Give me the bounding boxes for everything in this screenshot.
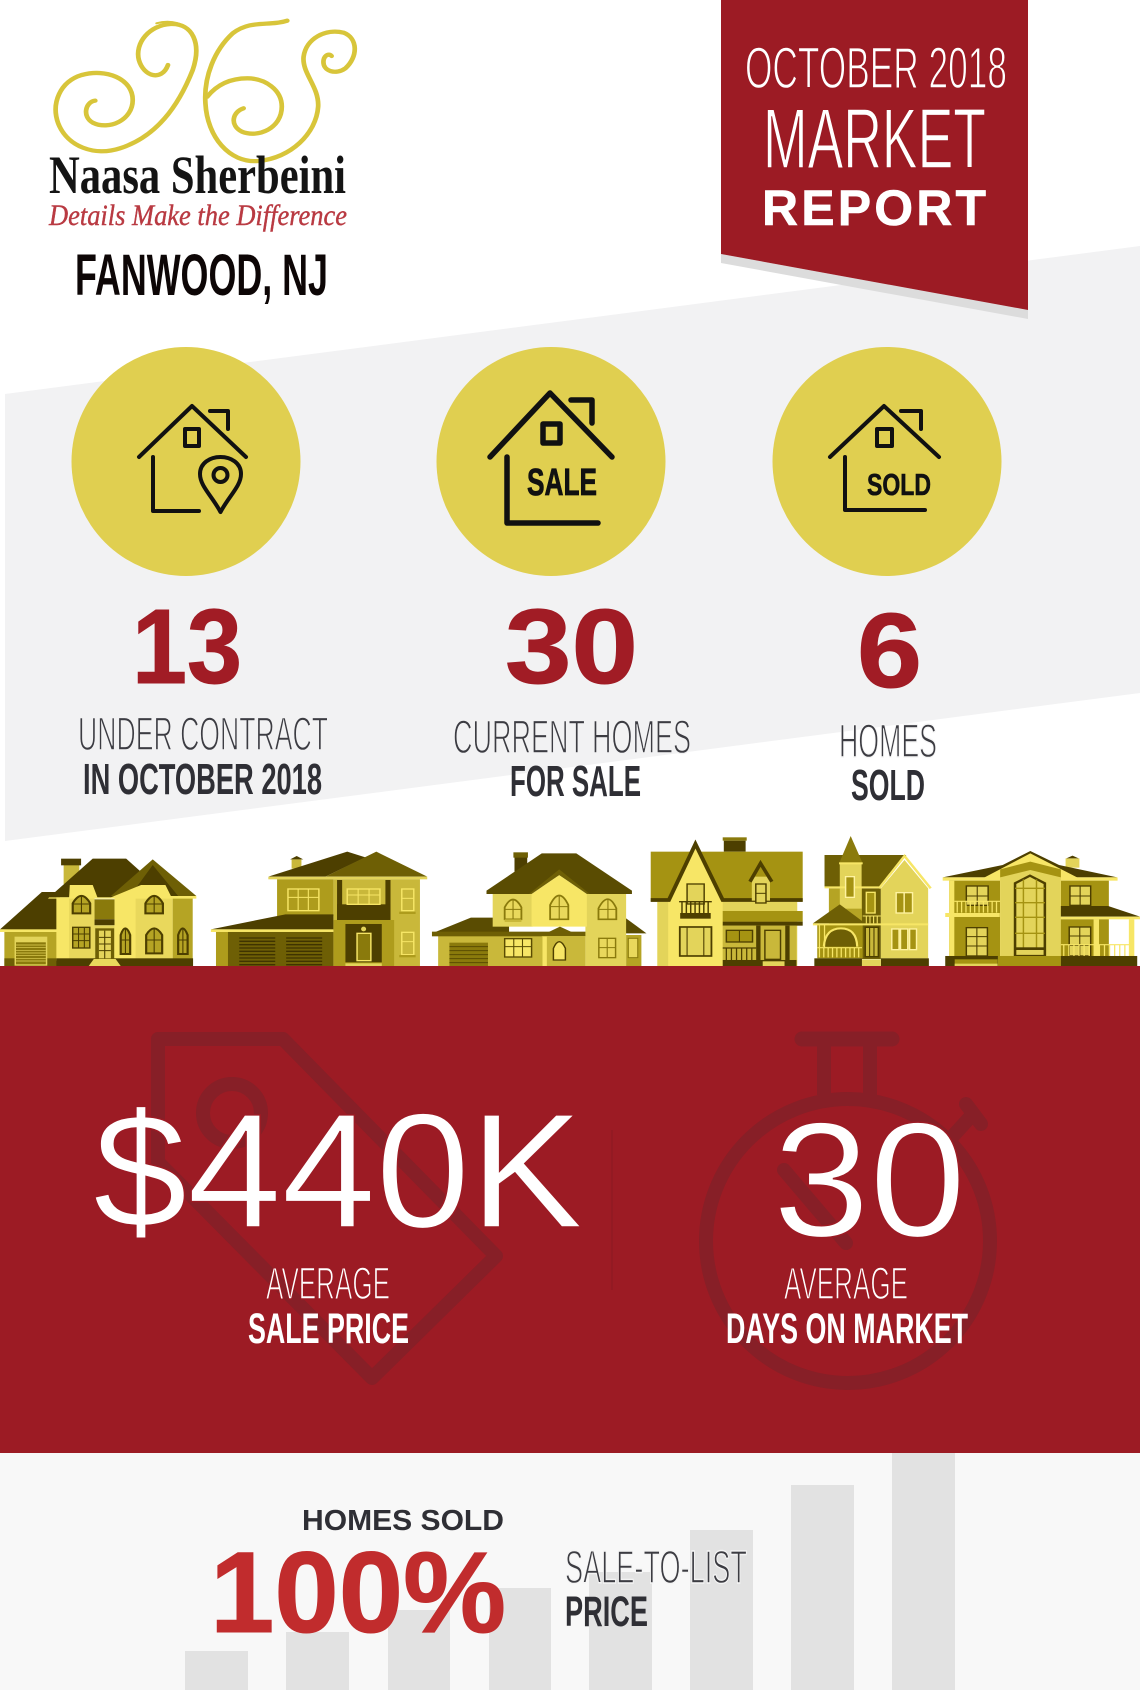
house 3 xyxy=(432,852,646,967)
sale-to-list label: SALE-TO-LIST xyxy=(565,1541,747,1593)
house 1 xyxy=(0,859,196,967)
panel: averages xyxy=(0,966,1140,1453)
label: average sale price: SALE PRICE xyxy=(248,1305,409,1353)
banner market: MARKET xyxy=(763,92,986,187)
house 5 xyxy=(813,836,931,967)
banner: market report xyxy=(721,0,1028,319)
illustration: row of houses right xyxy=(651,836,1140,968)
house 6 xyxy=(943,851,1140,968)
label bold: FOR SALE xyxy=(510,757,641,806)
label bold: SOLD xyxy=(851,761,925,810)
icon: house sold: SOLD xyxy=(867,467,931,502)
banner report: REPORT xyxy=(762,180,986,236)
bar chart background xyxy=(185,1453,955,1690)
logo name: Naasa Sherbeini xyxy=(49,145,346,205)
number 13: 13 xyxy=(132,588,242,706)
number 30: 30 xyxy=(505,588,638,706)
number 6: 6 xyxy=(857,592,922,710)
label: average sale price: AVERAGE xyxy=(266,1258,390,1309)
price label: PRICE xyxy=(565,1588,648,1636)
icon: house sale xyxy=(436,347,666,576)
location heading: FANWOOD, NJ xyxy=(75,243,328,308)
icon: price tag watermark xyxy=(158,1039,496,1378)
label: average sale price xyxy=(248,1258,409,1353)
value: average days: 30 xyxy=(773,1088,966,1271)
house 2 xyxy=(211,852,427,967)
logo monogram swirls xyxy=(56,21,355,161)
icon: house sold xyxy=(772,347,1002,576)
icon: stopwatch watermark xyxy=(706,1039,990,1383)
homes sold label: HOMES SOLD xyxy=(302,1505,504,1537)
stat: under contract xyxy=(72,347,328,804)
label bold: IN OCTOBER 2018 xyxy=(83,755,322,804)
logo: Naasa Sherbeini xyxy=(48,21,355,232)
label light: UNDER CONTRACT xyxy=(78,707,328,760)
stat: current homes for sale xyxy=(436,347,691,806)
label: average days on market: DAYS ON MARKET xyxy=(726,1305,968,1353)
100 percent value: 100% xyxy=(210,1529,506,1657)
icon: house sale: SALE xyxy=(527,462,597,504)
label: average days on market xyxy=(726,1258,968,1353)
divider xyxy=(612,1130,613,1290)
logo tagline: Details Make the Difference xyxy=(48,199,347,232)
house 4 xyxy=(651,837,803,967)
label: average days on market: AVERAGE xyxy=(784,1258,908,1309)
panel: sale-to-list xyxy=(0,1453,1140,1690)
value: average sale price: $440K xyxy=(93,1079,583,1262)
label light: CURRENT HOMES xyxy=(453,710,691,763)
label light: HOMES xyxy=(839,714,937,767)
stat: homes sold xyxy=(772,347,1002,810)
illustration: row of houses left xyxy=(0,852,646,967)
icon: house with location pin xyxy=(72,347,300,576)
